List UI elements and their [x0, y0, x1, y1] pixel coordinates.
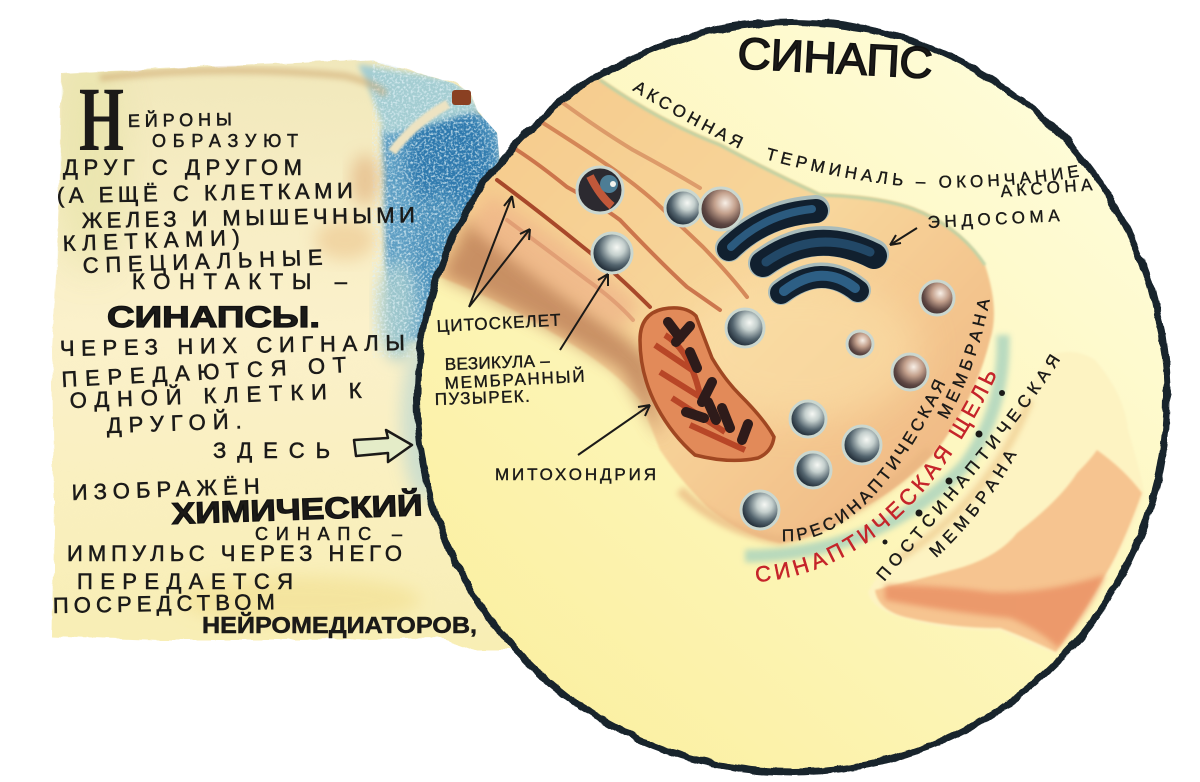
text block: explanation: ЗДЕСЬ: [213, 438, 330, 463]
text block: explanation: ИМПУЛЬС ЧЕРЕЗ НЕГО: [67, 541, 402, 566]
text block: explanation: ОДНОЙ КЛЕТКИ К: [69, 378, 362, 413]
label: cytoskeleton: [436, 196, 561, 336]
cytoskeleton filaments: [497, 103, 747, 320]
label: endosome: ЭНДОСОМА: [927, 206, 1061, 232]
text block: explanation: ДРУГ С ДРУГОМ: [63, 155, 302, 180]
neurotransmitter dots: [882, 390, 1005, 544]
text block: explanation: СИНАПСЫ.: [107, 301, 320, 334]
label: vesicle: ПУЗЫРЕК.: [434, 387, 530, 409]
label: cytoskeleton: ЦИТОСКЕЛЕТ: [436, 311, 561, 336]
label: endosome: [890, 206, 1061, 245]
text block: explanation: ИЗОБРАЖЁН: [71, 473, 260, 505]
text block: explanation: ПЕРЕДАЕТСЯ: [77, 569, 293, 594]
text block: explanation: КЛЕТКАМИ): [62, 225, 240, 256]
text block: explanation: ПОСРЕДСТВОМ: [53, 589, 275, 618]
text block: explanation: СИНАПС –: [255, 524, 402, 544]
text block: explanation: ПЕРЕДАЮТСЯ ОТ: [61, 352, 347, 392]
text block: explanation: Н: [79, 68, 124, 170]
text block: explanation: СПЕЦИАЛЬНЫЕ: [82, 245, 323, 278]
label: presynaptic membrane: ПРЕСИНАПТИЧЕСКАЯ: [782, 379, 946, 542]
text block: explanation: ХИМИЧЕСКИЙ: [171, 488, 423, 531]
panel: synapse disc: [417, 22, 1167, 772]
label: presynaptic membrane: [782, 300, 990, 542]
text block: explanation: ДРУГОЙ.: [106, 408, 242, 438]
arrow: here: [354, 430, 412, 462]
label: axon terminal: ТЕРМИНАЛЬ – ОКОНЧАНИЕ: [768, 148, 1080, 188]
text block: explanation: КОНТАКТЫ –: [132, 269, 348, 294]
text block: explanation: ЧЕРЕЗ НИХ СИГНАЛЫ: [60, 330, 405, 361]
label: vesicle: [434, 274, 608, 409]
label: presynaptic membrane: МЕМБРАНА: [937, 300, 990, 419]
text block: explanation: ОБРАЗУЮТ: [152, 131, 298, 151]
label: axon terminal: АКСОННАЯ: [632, 82, 744, 148]
heading: synapse: СИНАПС: [736, 29, 934, 88]
label: mitochondrion: МИТОХОНДРИЯ: [495, 465, 656, 484]
text block: explanation: [53, 68, 477, 638]
label: axon terminal: АКСОНА: [1000, 178, 1093, 198]
label: synaptic cleft: СИНАПТИЧЕСКАЯ ЩЕЛЬ: [756, 372, 996, 582]
text block: explanation: НЕЙРОМЕДИАТОРОВ,: [202, 611, 477, 638]
endosome: [729, 209, 874, 293]
label: mitochondrion: [495, 405, 656, 484]
axon terminal: [420, 78, 994, 543]
text block: explanation: ЕЙРОНЫ: [128, 108, 232, 131]
label: postsynaptic membrane: ПОСТСИНАПТИЧЕСКАЯ: [876, 354, 1060, 582]
text block: explanation: ЖЕЛЕЗ И МЫШЕЧНЫМИ: [82, 202, 415, 233]
panel: explanatory paper: [51, 60, 512, 651]
spot: torn edge: [452, 90, 471, 105]
postsynaptic cell: [868, 352, 1145, 654]
text block: explanation: (А ЕЩЁ С КЛЕТКАМИ: [57, 178, 353, 208]
label: axon terminal: [632, 82, 1093, 198]
vesicles: [577, 167, 954, 529]
label: vesicle: МЕМБРАННЫЙ: [444, 367, 585, 393]
mitochondrion: [640, 308, 774, 460]
label: vesicle: ВЕЗИКУЛА –: [444, 351, 551, 374]
label: postsynaptic membrane: МЕМБРАНА: [928, 452, 1017, 558]
cleft tint: [745, 335, 1003, 556]
